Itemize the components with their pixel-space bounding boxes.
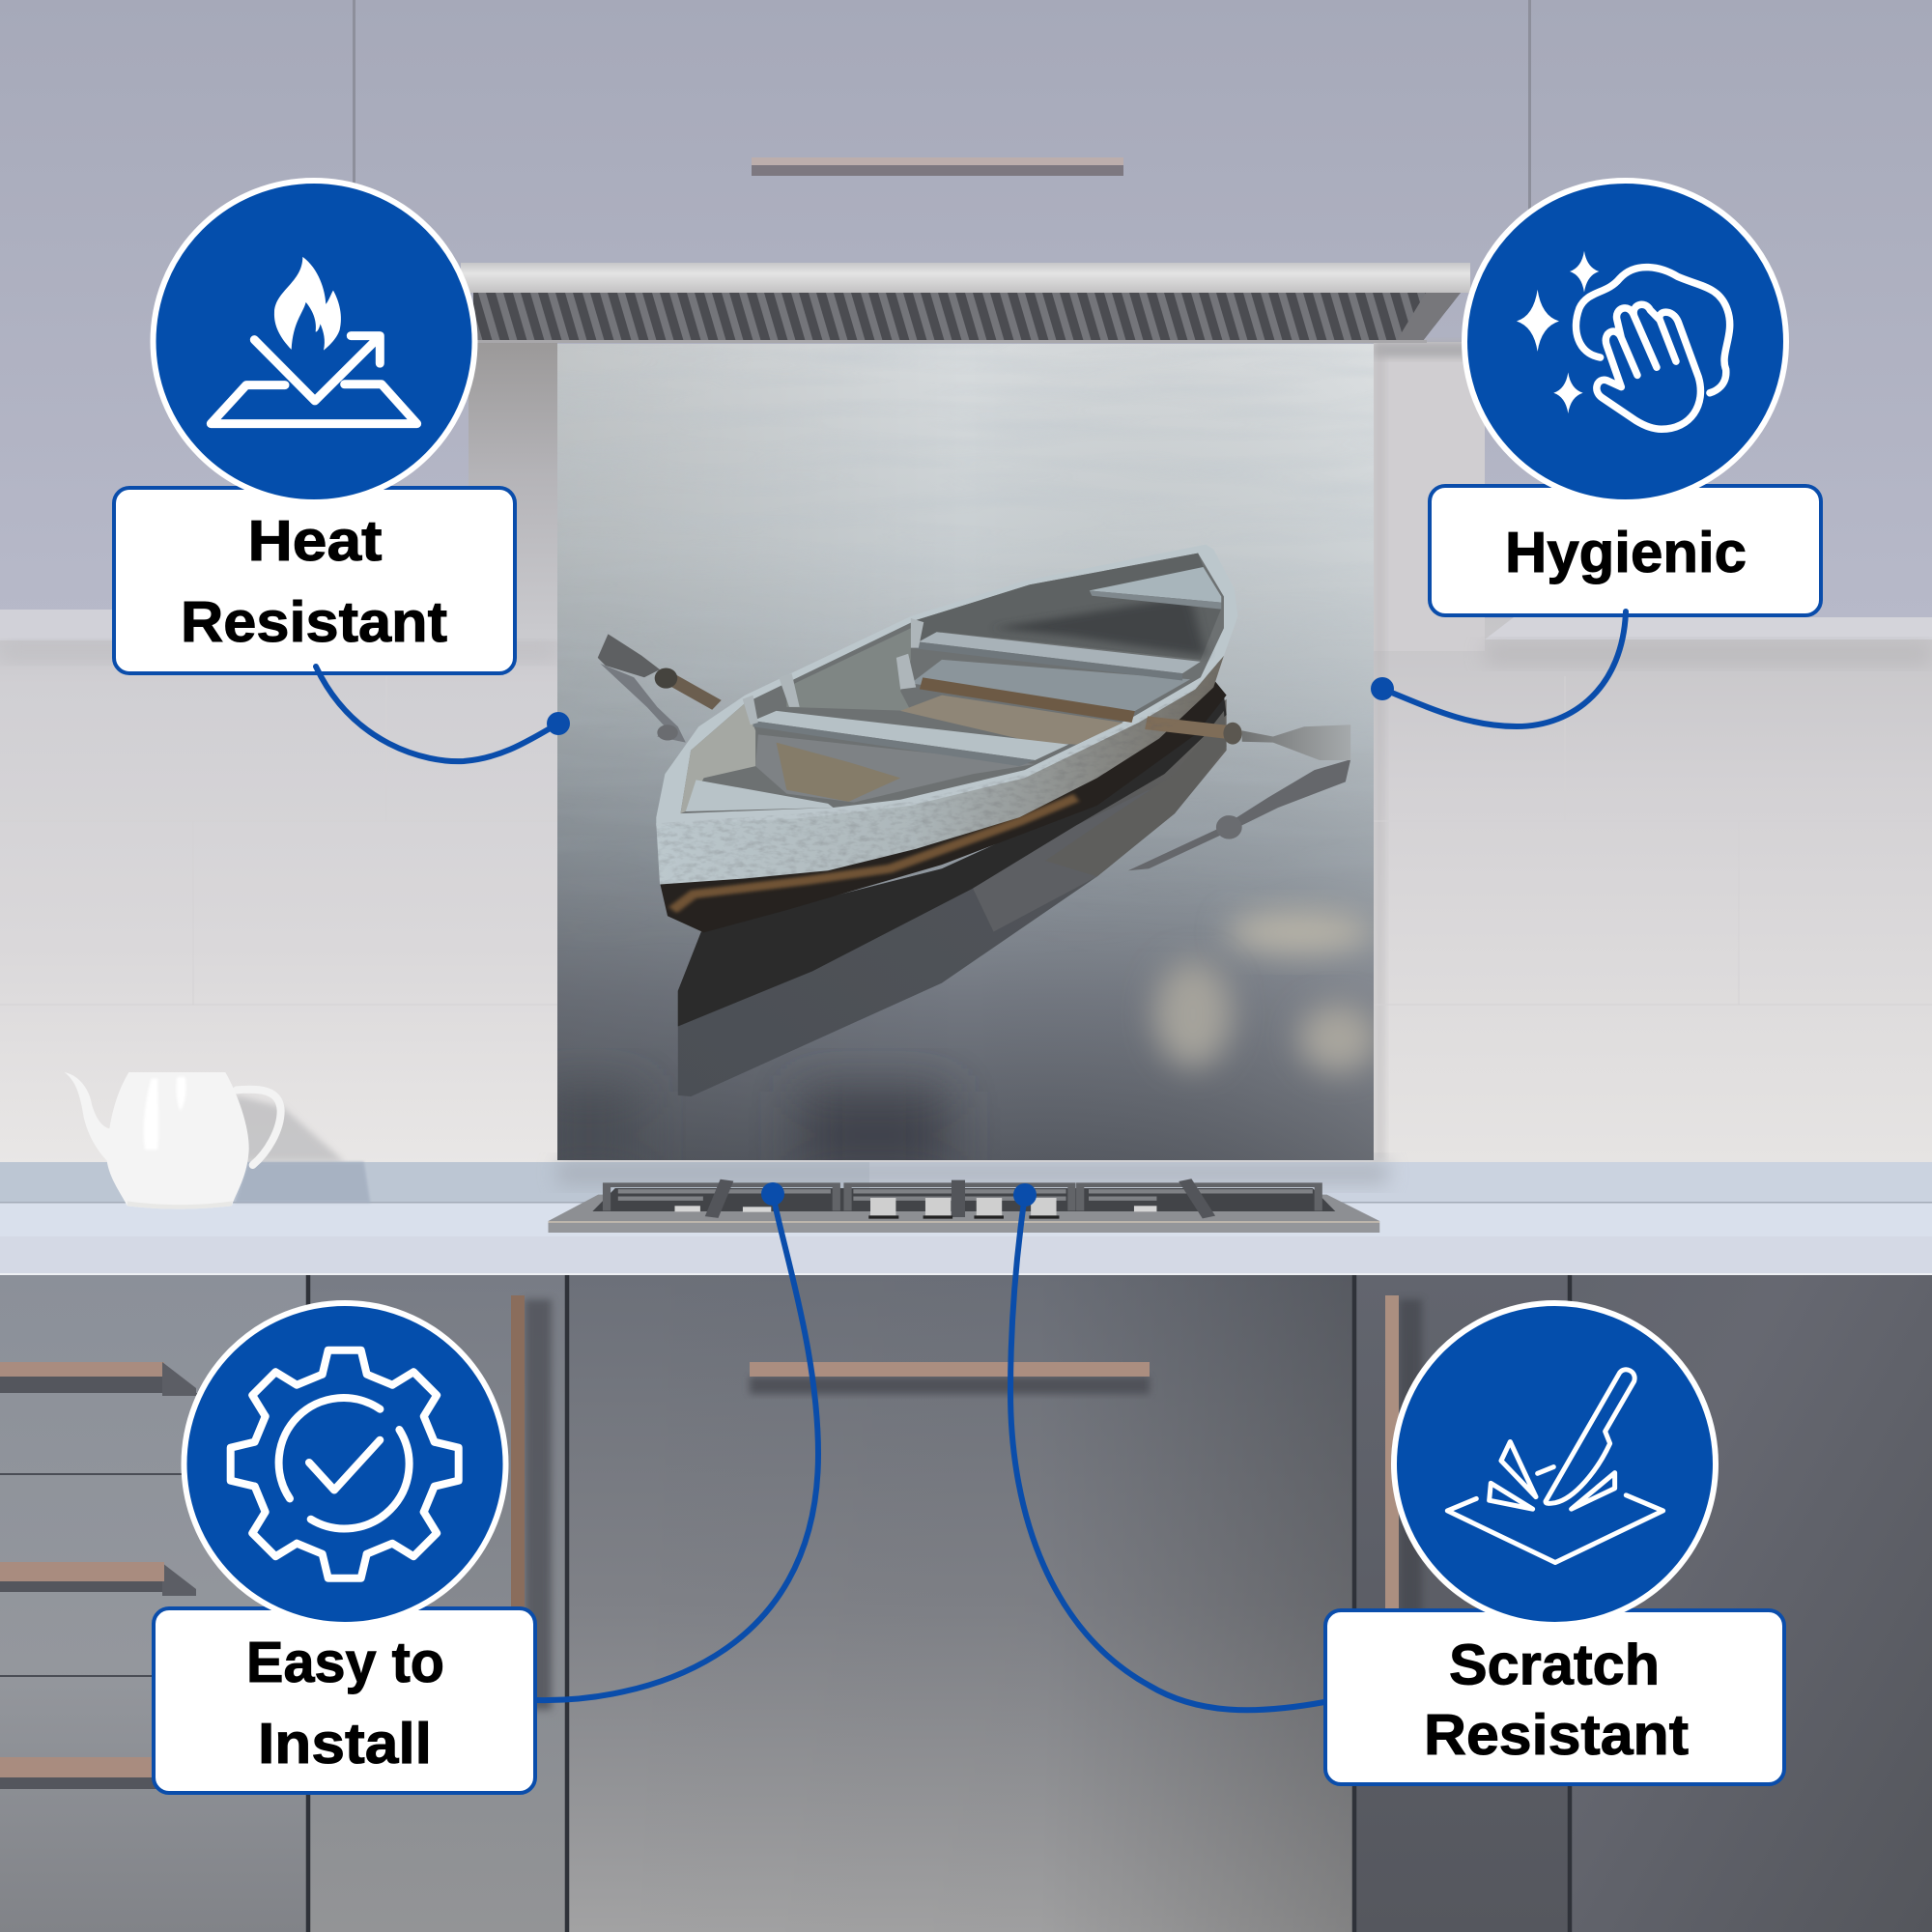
icon badge bbox=[184, 1303, 506, 1625]
icon: hand wiping with sparkles bbox=[1517, 251, 1730, 429]
hull side bbox=[656, 656, 1224, 885]
hull lower band bbox=[660, 679, 1227, 932]
label box bbox=[1430, 486, 1821, 615]
bench seats bbox=[686, 567, 1221, 811]
icon: flame on surface bbox=[211, 257, 417, 424]
icon badge bbox=[153, 181, 475, 502]
connector line bbox=[1010, 1195, 1324, 1710]
label text: Install bbox=[258, 1712, 432, 1776]
connector dot bbox=[761, 1182, 784, 1206]
tiled wall bbox=[0, 342, 1932, 1164]
callout: Heat Resistant bbox=[114, 181, 570, 761]
cabinet handle bbox=[752, 157, 1123, 176]
label box bbox=[154, 1608, 535, 1793]
connector line bbox=[1382, 611, 1626, 726]
boat reflection bbox=[678, 696, 1227, 1096]
label text: Hygienic bbox=[1505, 521, 1747, 584]
icon badge bbox=[1394, 1303, 1716, 1625]
callout: Hygienic bbox=[1371, 181, 1821, 726]
label text: Heat bbox=[247, 509, 383, 573]
label text bbox=[1424, 1633, 1689, 1767]
base cabinets bbox=[0, 1275, 1932, 1932]
label box bbox=[1325, 1610, 1784, 1784]
boat rim bbox=[656, 545, 1237, 826]
label text: Resistant bbox=[181, 590, 447, 654]
right oar bbox=[922, 683, 1350, 760]
callout: Easy to Install bbox=[154, 1182, 818, 1793]
panel: boat on water glass splashback bbox=[541, 344, 1377, 1179]
connector dot bbox=[1013, 1183, 1037, 1207]
teapot bbox=[65, 1072, 370, 1209]
boat interior bbox=[680, 554, 1224, 813]
connector line bbox=[537, 1194, 818, 1700]
left oar bbox=[598, 634, 717, 705]
cooktop bbox=[549, 1180, 1379, 1233]
connector line bbox=[316, 667, 558, 761]
oarlocks bbox=[743, 618, 923, 724]
callout: Scratch Resistant bbox=[1010, 1183, 1784, 1784]
control knobs bbox=[674, 1198, 1156, 1217]
boat floor bbox=[900, 696, 1122, 745]
countertop bbox=[0, 1160, 1932, 1275]
label text: Resistant bbox=[1424, 1703, 1689, 1767]
drawer handles bbox=[0, 1362, 198, 1789]
label box bbox=[114, 488, 515, 673]
icon: knife scratching surface bbox=[1447, 1370, 1663, 1562]
connector dot bbox=[547, 712, 570, 735]
hull weathering bbox=[656, 656, 1224, 885]
door handles bbox=[511, 1295, 1422, 1710]
upper cabinets bbox=[0, 0, 1932, 618]
range hood bbox=[461, 263, 1470, 343]
label text bbox=[246, 1631, 444, 1776]
label text bbox=[181, 509, 447, 654]
icon: gear with check mark bbox=[230, 1350, 459, 1578]
label text: Easy to bbox=[246, 1631, 444, 1694]
boat bbox=[598, 545, 1350, 1096]
connector dot bbox=[1371, 677, 1394, 700]
icon badge bbox=[1464, 181, 1786, 502]
grates bbox=[607, 1180, 1319, 1217]
label text: Scratch bbox=[1449, 1633, 1660, 1696]
water light reflections bbox=[541, 911, 1377, 1179]
oar reflections bbox=[600, 664, 1350, 870]
